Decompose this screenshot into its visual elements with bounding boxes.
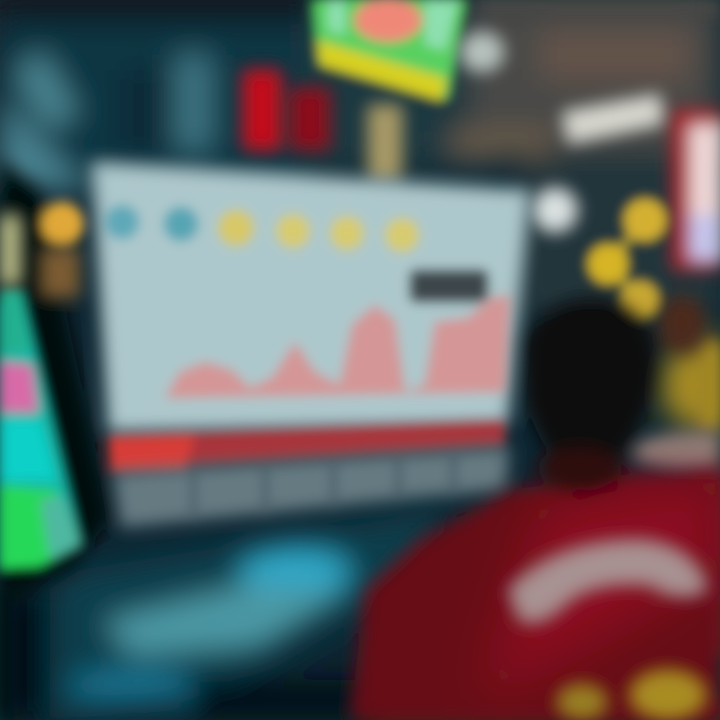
- area chart: [165, 295, 510, 398]
- ceiling lights: [460, 32, 664, 232]
- pale background behind shoulder: [630, 432, 720, 472]
- red lights above the screen: [243, 70, 330, 150]
- person: viewer with red shirt: [350, 295, 720, 720]
- sign post: [368, 105, 402, 180]
- hanging sign: green and yellow: [312, 0, 465, 102]
- shoulder shade right: [658, 295, 706, 355]
- shirt print: [508, 540, 708, 622]
- yellow figure to the right: [660, 335, 720, 435]
- red shirt: [350, 465, 720, 720]
- monitor top bezel pale strip: [0, 215, 20, 285]
- head: [524, 298, 656, 478]
- lower desk and keyboard: [0, 510, 450, 720]
- screen surface: [92, 162, 530, 432]
- neck shade: [538, 446, 622, 490]
- background: upper room: [0, 0, 720, 320]
- grey data strip: [112, 446, 510, 528]
- orange dot: [40, 202, 84, 246]
- status dots row: [105, 205, 419, 252]
- red strip: [108, 420, 505, 472]
- panel: main chart screen: [92, 162, 530, 528]
- yellow connected nodes icon: [587, 198, 667, 320]
- shirt lower yellow print: [557, 670, 706, 720]
- left monitor: [0, 160, 110, 600]
- tan patch: [40, 248, 80, 298]
- monitor frame: [0, 160, 110, 600]
- right-hand bright display: [672, 110, 720, 270]
- monitor colourful display: [0, 290, 82, 570]
- dark label on the chart: [410, 270, 488, 302]
